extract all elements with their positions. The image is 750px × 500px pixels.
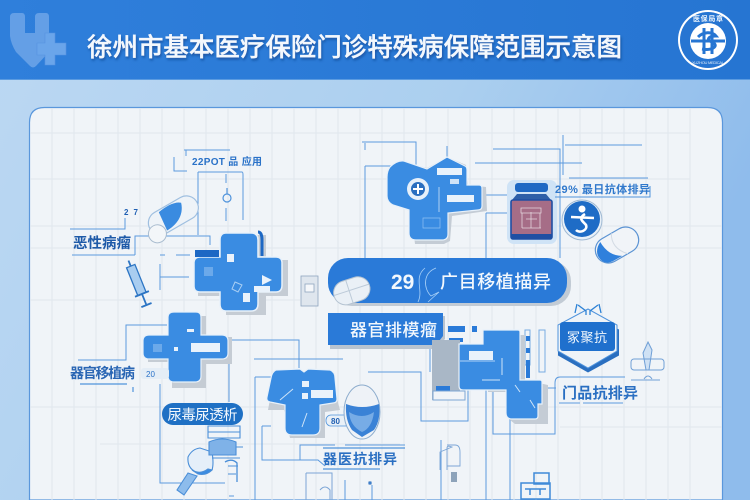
- icon: figure at right: [631, 342, 664, 380]
- pill label: uremia dialysis: [162, 403, 243, 425]
- icon: round emblem logo: 医保局章: [693, 14, 723, 23]
- icon: pill on banner: [330, 274, 373, 308]
- label: small chip: [141, 368, 169, 379]
- banner: transplant: 广目移植描异: [440, 271, 551, 292]
- badge: hexagon: [558, 304, 619, 372]
- icon: round emblem logo: XUZHOU MEDICAL: [692, 60, 725, 65]
- connector lines: [70, 135, 648, 500]
- label: small number: 27: [124, 208, 139, 217]
- icon: circle person: [562, 200, 602, 240]
- icon: medicine bottle: [507, 180, 557, 244]
- label: small number chip: 80: [331, 417, 340, 426]
- pill label: uremia dialysis: 尿毒尿透析: [168, 407, 238, 424]
- badge: hexagon: 冢聚抗: [567, 330, 607, 345]
- title: 徐州市基本医疗保险门诊特殊病保障范围示意图: [87, 34, 622, 62]
- banner: organ tumor: [328, 313, 445, 349]
- shape: blue shield with emblem: [387, 157, 487, 244]
- label: malignant tumor: 恶性病瘤: [73, 234, 132, 252]
- label: medical rejection: 器医抗排异: [323, 451, 397, 467]
- shape: blue clinic block: [432, 330, 548, 424]
- icon: capsule right: [591, 222, 643, 268]
- label: top small heading: 22POT 品 应用: [192, 155, 262, 168]
- label: drug rejection: 门品抗排异: [562, 384, 638, 402]
- icon: device sketch bottom: [440, 445, 460, 482]
- icon: dialysis sketch: [177, 426, 243, 495]
- label: small number chip: [326, 415, 350, 426]
- label: 29 percent: 29% 最日抗体排异: [555, 182, 650, 196]
- icon: hospital building bottom: [521, 473, 550, 499]
- icon: medical cross upper: [194, 232, 288, 315]
- label: organ disease left: 器官移植病: [70, 365, 135, 381]
- icon: face mask: [344, 385, 380, 439]
- icon: building strips: [448, 326, 545, 378]
- banner: organ tumor: 器官排模瘤: [350, 321, 437, 340]
- icon: small hook: [223, 188, 231, 202]
- icon: blue cross lower: [143, 312, 232, 388]
- decoration under organ label: [80, 384, 133, 392]
- icon: faded medical plus mark: [10, 13, 66, 68]
- icon: small box sketch lower left: [306, 473, 372, 500]
- main panel: [30, 108, 722, 500]
- banner: transplant: [328, 258, 571, 308]
- label: small chip: 20: [146, 370, 155, 379]
- header band: [0, 0, 750, 80]
- icon: syringe: [122, 258, 153, 308]
- icon: shirt shaped card: [267, 369, 340, 438]
- icon: pill top left: [140, 191, 205, 246]
- label: medical rejection: [323, 448, 405, 469]
- icon: round emblem logo: [678, 10, 738, 70]
- icon: small device: [301, 276, 318, 306]
- banner: transplant: 29: [391, 271, 414, 294]
